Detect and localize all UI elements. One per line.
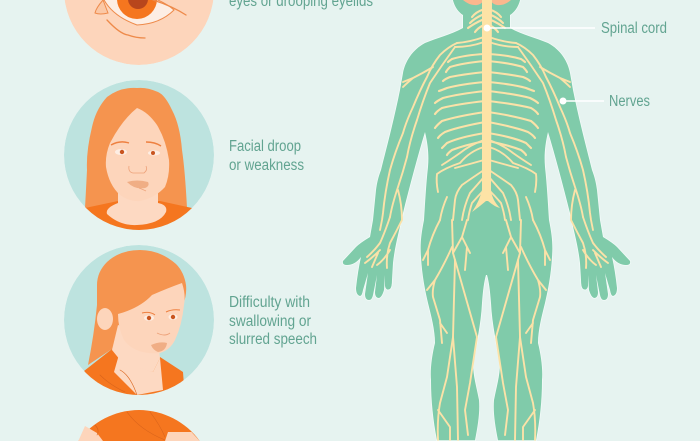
label: spinal cord: Spinal cord — [601, 20, 667, 37]
text: slurred speech: slurred speech — [229, 331, 317, 348]
spinal cord — [472, 0, 500, 212]
body silhouette — [343, 0, 630, 440]
text: swallowing or: swallowing or — [229, 313, 311, 330]
icon: swallowing difficulty — [64, 245, 214, 400]
brain lobes — [460, 0, 514, 5]
icon: fourth symptom circle — [78, 410, 200, 441]
body figure with nervous system — [343, 0, 630, 440]
label: spinal cord — [484, 20, 667, 37]
text: facial droop: Facial droop — [229, 138, 301, 155]
icon: drooping eye — [64, 0, 214, 65]
text: difficulty with: Difficulty with — [229, 294, 310, 311]
label: nerves: Nerves — [609, 93, 650, 110]
leg nerves — [438, 220, 455, 440]
icon: facial droop — [64, 80, 214, 235]
right nerve branches — [488, 10, 608, 440]
label: nerves — [560, 93, 650, 110]
left nerve branches — [365, 10, 485, 440]
arm nerves — [380, 43, 457, 230]
text: or weakness: or weakness — [229, 157, 304, 174]
